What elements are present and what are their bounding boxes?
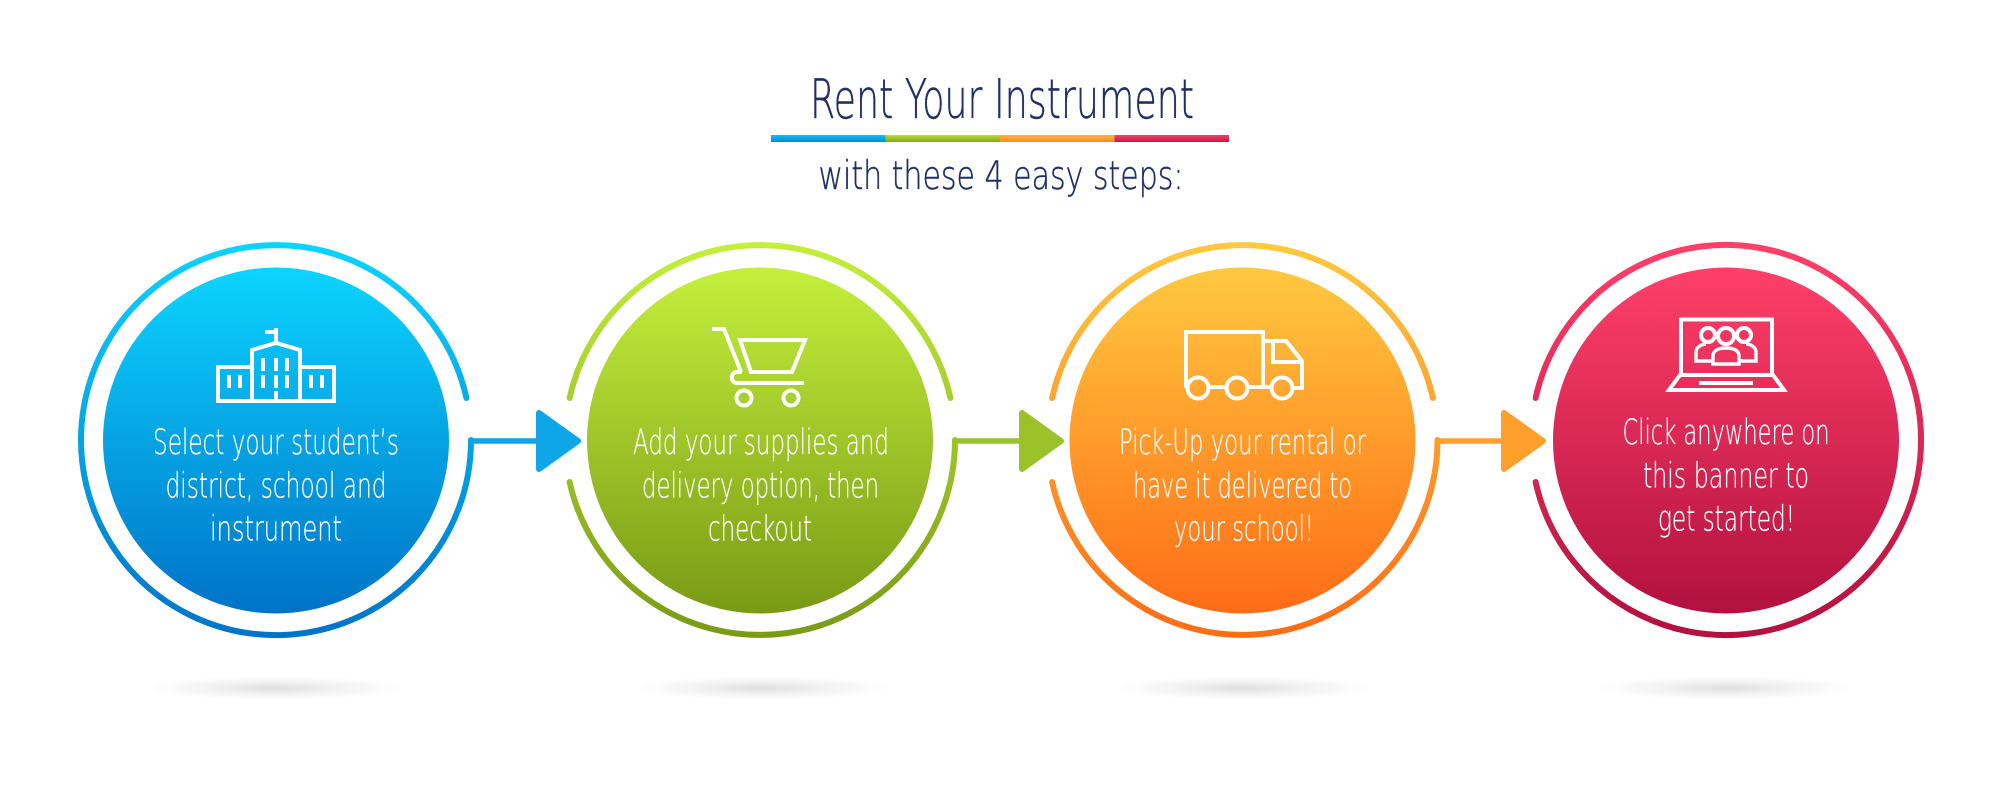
arrow: step 1 to 2	[471, 413, 578, 469]
text: step 4: this banner to	[1643, 456, 1809, 496]
inner disc: step 4	[1553, 268, 1899, 614]
panel: step 3 pick up	[1052, 245, 1438, 635]
subtitle: with these 4 easy steps:	[818, 154, 1184, 199]
text: step 2: delivery option, then	[642, 466, 879, 506]
inner disc: step 1	[103, 268, 449, 614]
outer ring: step 2	[570, 245, 955, 635]
arrow: step 3 to 4	[1438, 413, 1543, 469]
arrow: step 2 to 3	[955, 413, 1061, 469]
text: step 2: Add your supplies and	[633, 423, 889, 463]
outer ring: step 4	[1536, 245, 1921, 635]
panel: step 2 add supplies	[570, 245, 955, 635]
text: step 2: checkout	[708, 510, 812, 550]
text: step 3: have it delivered to	[1133, 466, 1352, 506]
text: step 4	[1622, 413, 1830, 540]
icon: shopping cart	[712, 329, 805, 406]
icon: laptop with people	[1669, 320, 1784, 390]
text: step 3: your school!	[1174, 510, 1314, 550]
inner disc: step 2	[587, 268, 933, 614]
text: step 4: Click anywhere on	[1622, 413, 1830, 453]
outer ring: step 3	[1052, 245, 1438, 635]
text: step 2	[633, 423, 889, 550]
text: step 1: district, school and	[166, 466, 386, 506]
text: step 3	[1119, 423, 1366, 550]
shadow: step 1	[145, 676, 405, 700]
text: step 1: instrument	[210, 510, 342, 550]
panel: step 4 get started	[1536, 245, 1921, 635]
text: step 3: Pick-Up your rental or	[1119, 423, 1366, 463]
title: Rent Your Instrument	[810, 68, 1194, 131]
icon: delivery truck	[1186, 332, 1302, 398]
text: step 4: get started!	[1658, 500, 1795, 540]
outer ring: step 1	[81, 245, 471, 635]
inner disc: step 3	[1070, 268, 1416, 614]
text: step 1	[153, 423, 399, 550]
colour divider bar	[771, 135, 1229, 142]
panel: step 1 select	[81, 245, 471, 635]
text: step 1: Select your student’s	[153, 423, 399, 463]
shadow: step 4	[1596, 676, 1856, 700]
shadow: step 3	[1113, 676, 1373, 700]
icon: school building	[218, 328, 334, 401]
shadow: step 2	[632, 676, 892, 700]
